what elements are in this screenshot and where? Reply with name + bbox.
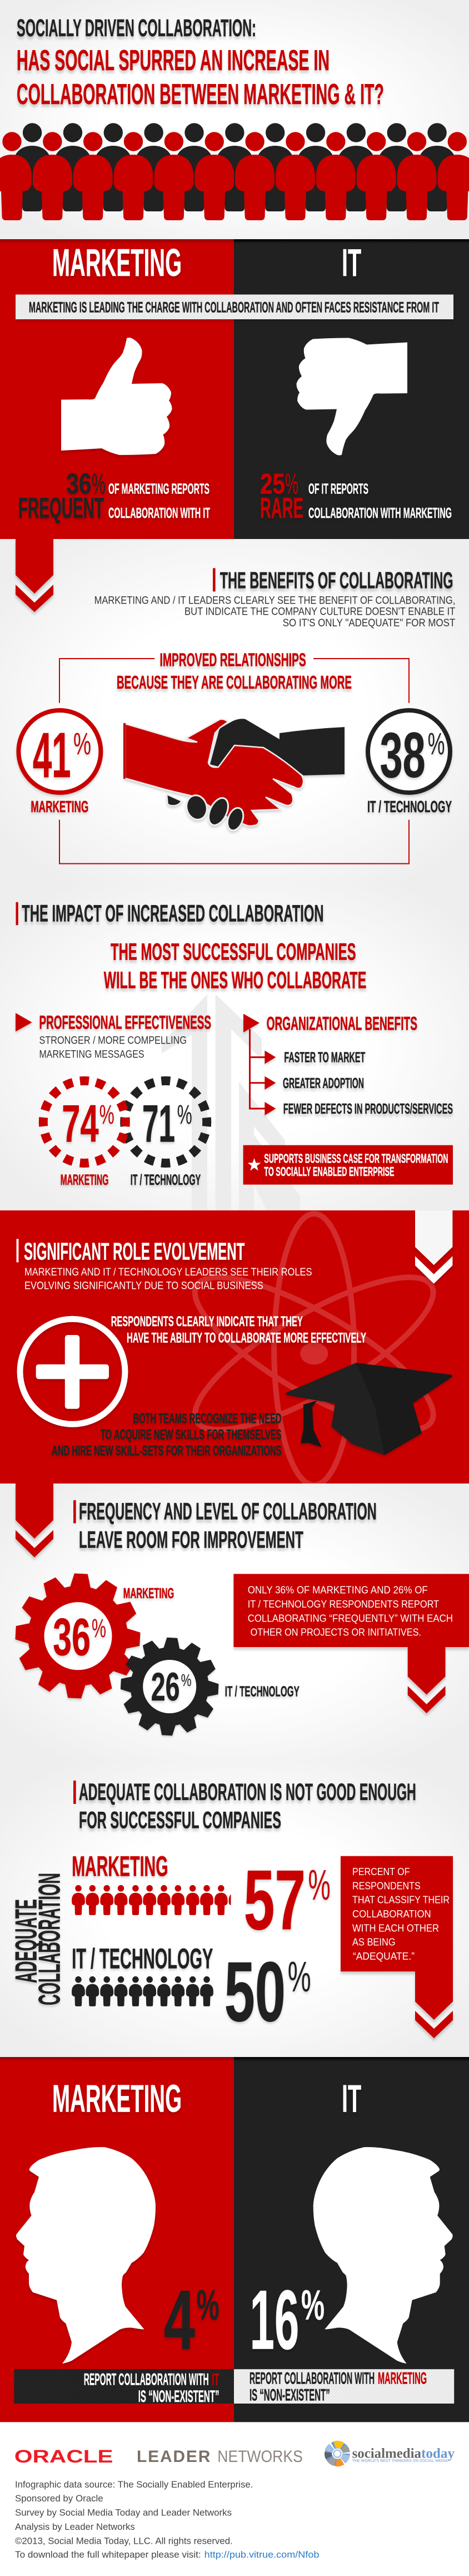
heading [17, 1238, 245, 1265]
banner: marketing non-existent: REPORT COLLABORATION WITH [84, 2371, 209, 2389]
gear: marketing 36%: MARKETING [123, 1585, 174, 1601]
stat: IT rare: RARE [260, 492, 303, 525]
stat circle: IT 38%: % [428, 726, 445, 761]
pictogram: dark people [72, 1976, 213, 2006]
heading [117, 650, 352, 693]
stat: IT rare [260, 468, 452, 525]
text: COLLABORATION [32, 1873, 67, 2005]
gear: marketing 36%: 36 [53, 1608, 91, 1667]
panel: marketing vs IT [0, 239, 469, 539]
icon: triangle and branch arrows [243, 1013, 276, 1115]
arrow: white chevron ribbon [415, 1210, 452, 1284]
callout: percent of respondents: COLLABORATION [352, 1908, 431, 1920]
banner: marketing non-existent: IS “NON-EXISTENT” [138, 2387, 219, 2406]
front row: red people [0, 132, 469, 220]
gear: IT 26%: IT / TECHNOLOGY [225, 1683, 300, 1700]
callout: only 36% of marketing: ONLY 36% OF MARKETING AND 26% OF [248, 1584, 428, 1596]
source notes: To download the full whitepaper please visit: [15, 2549, 201, 2560]
callout: percent of respondents [341, 1856, 453, 2038]
icon: star [248, 1158, 261, 1170]
background: benefits section [0, 539, 469, 884]
dial: marketing 74%: MARKETING [61, 1171, 108, 1188]
arrow: red chevron ribbon 1 [16, 539, 53, 612]
stat: marketing frequent: FREQUENT [18, 492, 104, 525]
logo: Oracle: ORACLE [14, 2446, 113, 2466]
callout: percent of respondents: RESPONDENTS [352, 1880, 421, 1891]
statement: ability to collaborate [111, 1314, 366, 1346]
stat circle: marketing 41%: % [73, 726, 91, 761]
banner: IT non-existent: IS “NON-EXISTENT” [250, 2386, 330, 2405]
dial: marketing 74%: % [99, 1100, 114, 1130]
stat: IT rare: 25 [260, 468, 285, 501]
stat circle: IT 38% [367, 710, 452, 816]
callout: only 36% of marketing: OTHER ON PROJECTS OR INITIATIVES. [251, 1626, 421, 1638]
icon: wheel [328, 2444, 347, 2463]
statement: new skills [52, 1411, 281, 1459]
chart: IT 50% people: IT / TECHNOLOGY [72, 1942, 213, 1974]
stat: marketing frequent [18, 468, 210, 525]
heading: IT: IT [342, 241, 361, 284]
section: benefits heading [94, 567, 456, 629]
background: frequency section [0, 1484, 469, 1762]
callout: percent of respondents: “ADEQUATE.” [353, 1950, 415, 1962]
callout: percent of respondents: WITH EACH OTHER [352, 1922, 439, 1934]
chart: marketing 57% people [72, 1856, 331, 1933]
body text [94, 595, 456, 629]
heading: PROFESSIONAL EFFECTIVENESS [39, 1012, 211, 1033]
dial: marketing 74%: 74 [62, 1095, 99, 1154]
icon: head profile right [313, 2147, 453, 2364]
stat: % [288, 1953, 311, 2001]
callout: only 36% of marketing: IT / TECHNOLOGY RESPONDENTS REPORT [248, 1598, 439, 1610]
stat: marketing frequent: COLLABORATION WITH IT [108, 505, 210, 521]
stat: marketing frequent: % [92, 468, 106, 501]
stat: marketing 4%: 4 [164, 2273, 195, 2367]
improved relationships frame [18, 650, 452, 864]
banner: marketing non-existent [14, 2369, 234, 2406]
stat: 50 [224, 1944, 286, 2039]
list of benefits: GREATER ADOPTION [283, 1075, 364, 1091]
stat circle: marketing 41%: 41 [33, 720, 71, 791]
callout: only 36% of marketing [233, 1574, 469, 1713]
icon: handshake [123, 719, 345, 833]
banner: IT non-existent [234, 2369, 454, 2405]
logo: Leader Networks: LEADER [137, 2448, 211, 2466]
callout: most successful companies [104, 938, 366, 993]
icon: triangle [16, 1013, 32, 1031]
source notes: ©2013, Social Media Today, LLC. All rights reserved. [15, 2535, 233, 2546]
description [39, 1035, 187, 1061]
section: frequency heading: LEAVE ROOM FOR IMPROVEMENT [79, 1526, 303, 1553]
background: adequate section [0, 1762, 469, 2057]
heading: marketing: MARKETING [52, 2076, 182, 2120]
dial: IT 71% [124, 1081, 207, 1188]
stat: marketing frequent: 36 [67, 468, 91, 501]
arrow: red chevron ribbon 2 [16, 1484, 53, 1558]
panel: non-existent collaboration [0, 2057, 469, 2422]
description [24, 1267, 312, 1292]
vertical label: adequate collaboration: ADEQUATE [9, 1899, 43, 1983]
dial: IT 71%: IT / TECHNOLOGY [131, 1171, 201, 1188]
list of benefits [283, 1049, 453, 1117]
callout: only 36% of marketing: COLLABORATING “FREQUENTLY” WITH EACH [248, 1612, 453, 1624]
stat: IT rare: % [285, 468, 298, 501]
section: adequate heading: FOR SUCCESSFUL COMPANIES [79, 1807, 281, 1834]
source notes [15, 2479, 319, 2560]
footer background [0, 2422, 469, 2576]
statement: new skills: AND HIRE NEW SKILL-SETS FOR THEIR ORGANIZATIONS [52, 1443, 281, 1459]
gear: IT 26%: 26 [151, 1665, 180, 1709]
pictogram: red people [72, 1885, 242, 1915]
title [17, 14, 384, 111]
stat: marketing 4%: % [197, 2282, 219, 2329]
panel: professional effectiveness [16, 1012, 211, 1188]
logo: Social Media Today: THE WORLD'S BEST THINKERS ON SOCIAL MEDIA [352, 2459, 448, 2463]
icon: head profile left [16, 2147, 156, 2364]
list of benefits: FASTER TO MARKET [284, 1049, 365, 1066]
logo: Social Media Today: socialmedia [352, 2446, 421, 2461]
section: impact heading [16, 900, 323, 927]
chart: IT 50% people [72, 1942, 311, 2039]
panel: organizational benefits [243, 1013, 453, 1185]
stat: % [308, 1861, 331, 1909]
stat: IT rare: OF IT REPORTS [308, 481, 368, 497]
logo: Leader Networks [137, 2448, 303, 2466]
description: MARKETING MESSAGES [39, 1049, 144, 1061]
gear: IT 26% [121, 1637, 300, 1736]
statement: new skills: BOTH TEAMS RECOGNIZE THE NEED [133, 1411, 281, 1426]
dial: IT 71%: 71 [142, 1095, 175, 1154]
dial: marketing 74% [43, 1081, 126, 1188]
icon: thumb down [296, 338, 407, 455]
description: EVOLVING SIGNIFICANTLY DUE TO SOCIAL BUSINESS [24, 1280, 263, 1292]
stat: IT 16%: 16 [250, 2273, 299, 2367]
source notes: Analysis by Leader Networks [15, 2521, 135, 2532]
banner: marketing non-existent: IT [212, 2371, 219, 2389]
stat: IT 16%: % [301, 2282, 325, 2329]
chart: marketing 57% people: MARKETING [72, 1850, 168, 1882]
source notes: Survey by Social Media Today and Leader Networks [15, 2508, 232, 2518]
stat circle: marketing 41% [18, 710, 101, 816]
crowd of people icons [0, 123, 469, 220]
banner [16, 295, 453, 319]
statement: ability to collaborate: RESPONDENTS CLEARLY INDICATE THAT THEY [111, 1314, 303, 1329]
stat circle: IT 38%: 38 [380, 720, 426, 791]
title: SOCIALLY DRIVEN COLLABORATION: [17, 14, 256, 42]
back row: dark people [13, 123, 457, 211]
panel: significant role evolvement [0, 1210, 469, 1485]
watermark: atom [192, 1211, 436, 1484]
gear: IT 26%: % [181, 1670, 191, 1690]
icon: thumb up [61, 338, 172, 455]
stat circle: marketing 41%: MARKETING [31, 798, 88, 816]
heading: SIGNIFICANT ROLE EVOLVEMENT [24, 1238, 245, 1265]
watermark: up arrows [162, 994, 300, 1210]
heading: IT: IT [342, 2076, 361, 2120]
background: top section [0, 0, 469, 239]
logo: Leader Networks: NETWORKS [217, 2448, 303, 2466]
description: MARKETING AND IT / TECHNOLOGY LEADERS SEE THEIR ROLES [24, 1267, 312, 1278]
icon: plus in circle [20, 1319, 125, 1424]
heading: marketing: MARKETING [52, 241, 182, 284]
dial: IT 71%: % [177, 1100, 192, 1130]
description: STRONGER / MORE COMPELLING [39, 1035, 187, 1046]
source notes: Sponsored by Oracle [15, 2493, 103, 2504]
icon: graduation cap [286, 1363, 452, 1455]
vertical label: adequate collaboration [9, 1873, 67, 2005]
gear: marketing 36% [15, 1573, 174, 1699]
stat: 57 [244, 1852, 306, 1947]
callout: percent of respondents: PERCENT OF [352, 1866, 410, 1877]
logo: Social Media Today: today [421, 2446, 455, 2461]
section: frequency heading [73, 1499, 377, 1553]
section: adequate heading [73, 1779, 416, 1834]
callout: percent of respondents: AS BEING [352, 1936, 396, 1948]
statement: new skills: TO ACQUIRE NEW SKILLS FOR THEMSELVES [101, 1427, 281, 1443]
stat: marketing frequent: OF MARKETING REPORTS [108, 481, 209, 497]
dark half [234, 239, 469, 539]
logo: Social Media Today [328, 2444, 455, 2463]
callout: business case [243, 1145, 453, 1185]
source notes: Infographic data source: The Socially Enabled Enterprise. [15, 2479, 253, 2490]
background: impact section [0, 884, 469, 1210]
source notes: http://pub.vitrue.com/Nfob [204, 2549, 319, 2560]
heading: IMPROVED RELATIONSHIPS [160, 650, 306, 671]
callout: percent of respondents: THAT CLASSIFY THEIR [352, 1894, 450, 1906]
red half [0, 239, 234, 539]
gear: marketing 36%: % [92, 1613, 106, 1643]
